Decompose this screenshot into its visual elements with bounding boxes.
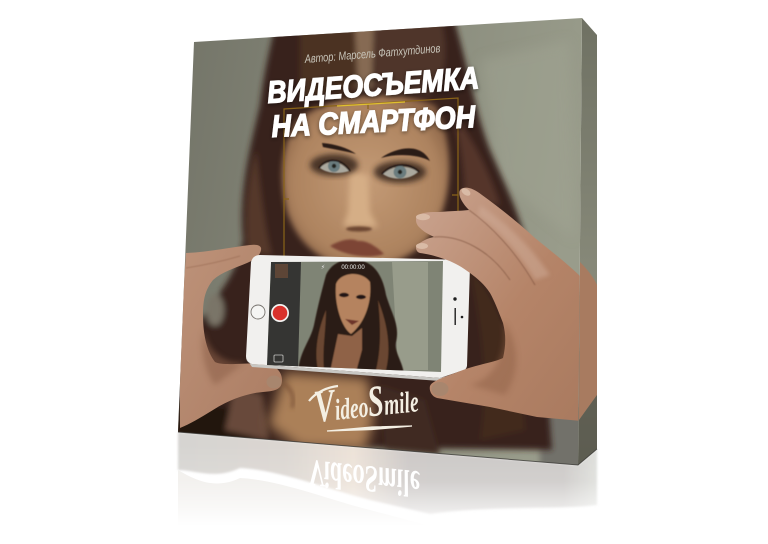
ear shadow <box>282 383 293 408</box>
camera controls panel <box>267 262 301 368</box>
box side face <box>578 18 597 465</box>
finger highlights <box>478 205 550 280</box>
author line: Автор: Марсель Фатхутдинов <box>303 41 441 66</box>
box front cover <box>170 10 590 470</box>
phone screen <box>265 258 445 374</box>
VideoSmile logo: VideoSmile <box>312 370 420 432</box>
home button <box>251 305 265 319</box>
finger crease <box>186 256 240 268</box>
eye shadow right <box>374 161 426 183</box>
eye shadow left <box>310 154 358 176</box>
timer: 00:00:00 <box>341 265 365 271</box>
grey gap behind left hand <box>206 294 224 326</box>
palm shadow <box>476 324 516 394</box>
fingernails <box>416 187 472 249</box>
title <box>268 66 480 140</box>
lower right background <box>538 306 580 465</box>
box bottom edge <box>178 432 597 465</box>
reflection on the floor <box>177 432 598 514</box>
thumb nail <box>432 382 448 396</box>
eyes <box>319 160 419 179</box>
right hand <box>416 187 582 421</box>
focus frame <box>284 98 458 258</box>
thumb nail <box>270 376 281 388</box>
speaker and sensors <box>453 297 463 325</box>
gallery thumbnail <box>275 264 288 278</box>
woman hair <box>172 12 552 455</box>
record button <box>271 304 289 322</box>
finger creases <box>434 210 535 285</box>
lips <box>330 239 384 256</box>
reflected logo: VideoSmile <box>307 451 422 505</box>
palm shadow <box>201 334 243 384</box>
nose highlight <box>343 172 378 227</box>
eyebrows <box>322 143 430 161</box>
woman neck and chest <box>268 372 374 450</box>
nose shadow <box>346 226 372 232</box>
title: НА СМАРТФОН <box>271 99 477 144</box>
flash icon: ⚡ <box>321 264 325 271</box>
woman face <box>282 95 449 268</box>
woman on screen <box>298 260 404 374</box>
left hand <box>180 245 282 428</box>
background light panel <box>494 68 500 90</box>
camera icon <box>274 355 283 362</box>
phone body <box>246 255 470 381</box>
title: ВИДЕОСЪЕМКА <box>266 60 480 110</box>
